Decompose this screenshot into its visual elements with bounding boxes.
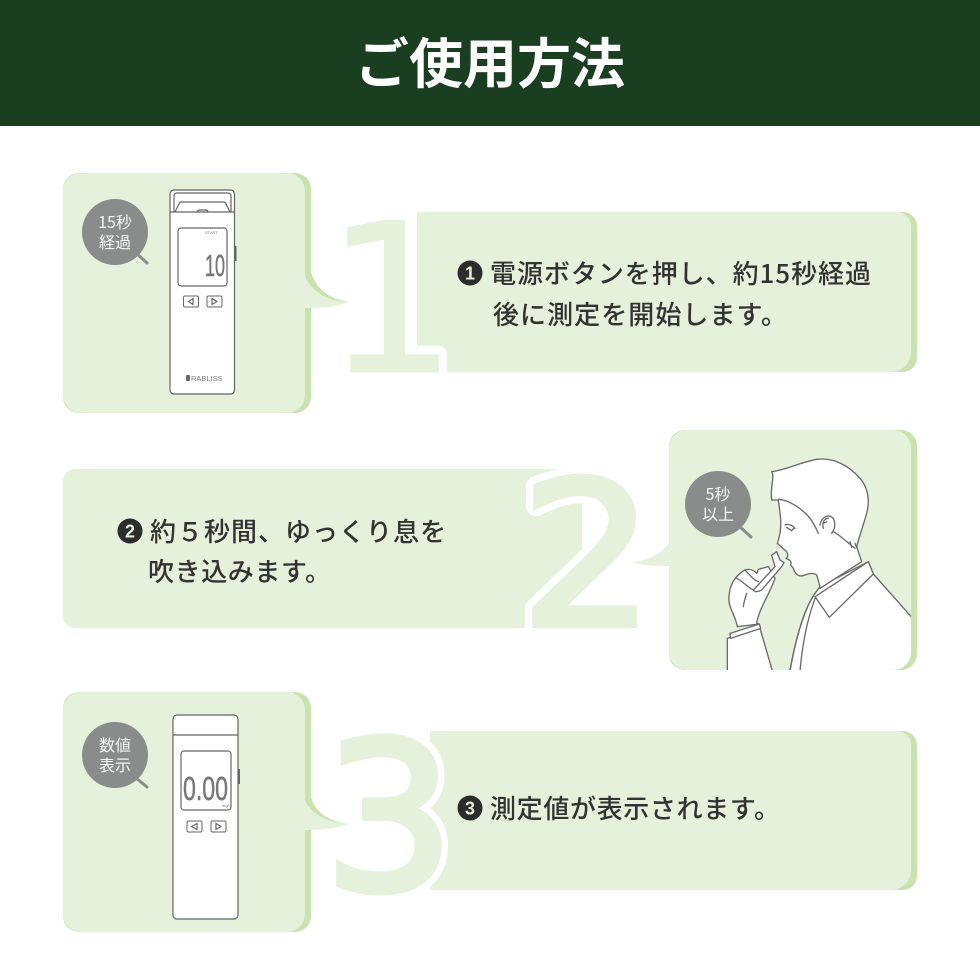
instruction text 1 [458, 254, 871, 332]
numeral 3: 3 [324, 700, 454, 938]
numeral 2: 2 [520, 440, 655, 673]
badge: 15 seconds: 15秒 [98, 209, 132, 233]
numeral 3: 3 [324, 700, 454, 938]
step 3 [63, 692, 917, 938]
badge: value display: 表示 [99, 752, 131, 776]
badge: value display: 数値 [99, 732, 131, 756]
badge: 5 seconds: 5秒 [706, 481, 730, 505]
instruction text 1: 1 [465, 264, 475, 284]
instruction text 3: 3 [465, 798, 475, 818]
panel: step 2 text [63, 469, 582, 628]
panel: step 1 image [63, 173, 349, 413]
panel: step 2 image [632, 430, 917, 670]
device illustration: 10 [205, 248, 225, 283]
panel: step 1 text [417, 212, 917, 372]
title: ご使用方法 [355, 35, 625, 95]
numeral 2: 2 [520, 440, 655, 673]
instruction text 2: 2 [125, 522, 135, 542]
instruction text 1: 後に測定を開始します。 [493, 295, 787, 332]
title band [0, 0, 980, 126]
panel: step 3 image [63, 692, 349, 932]
badge: 15 seconds [82, 199, 148, 265]
panel: step 3 text [430, 731, 917, 890]
illustration: man blowing into device [727, 459, 920, 680]
badge: 15 seconds: 経過 [99, 229, 131, 253]
device illustration: 0.00 [183, 770, 228, 807]
badge: 5 seconds [685, 471, 751, 537]
numeral 1: 1 [325, 180, 457, 422]
numeral 1: 1 [325, 180, 457, 422]
badge: 5 seconds: 以上 [702, 501, 734, 525]
instruction text 3: 測定値が表示されます。 [490, 789, 780, 826]
step 2 [63, 430, 920, 680]
device illustration: mg/l [222, 803, 230, 808]
instruction text 1: 電源ボタンを押し、約15秒経過 [490, 254, 871, 291]
step 1 [63, 173, 917, 422]
badge: value display [82, 722, 148, 788]
device illustration [173, 715, 240, 919]
device illustration [170, 190, 236, 394]
instruction text 2 [118, 512, 446, 589]
instruction text 2: 約５秒間、ゆっくり息を [150, 512, 446, 549]
device illustration: START [205, 230, 218, 235]
device illustration: RABLISS [191, 374, 223, 383]
instruction text 2: 吹き込みます。 [148, 552, 331, 589]
